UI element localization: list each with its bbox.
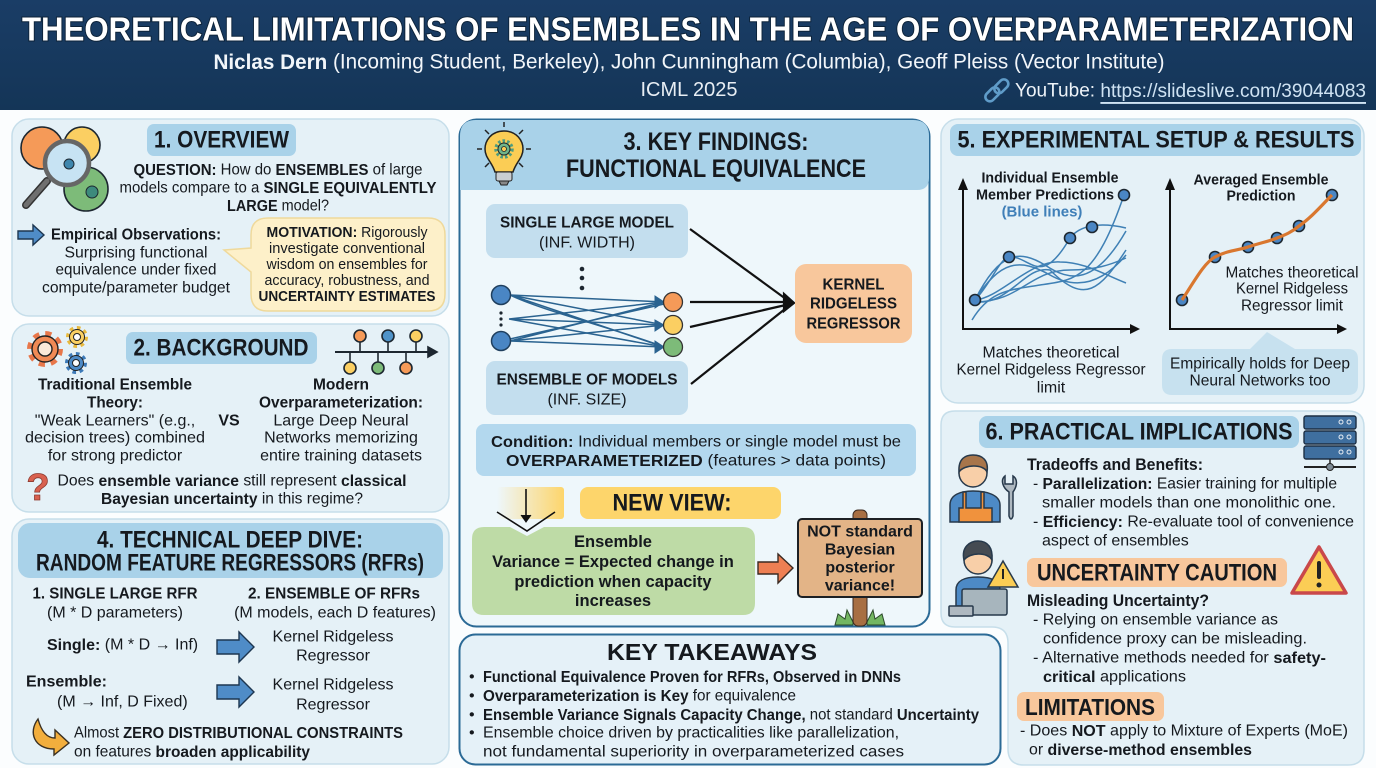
limitations heading: LIMITATIONS: [1025, 694, 1155, 720]
icon: engineer with wrench: [950, 455, 1016, 522]
condition box: [476, 424, 916, 476]
question text: LARGE model?: [227, 198, 329, 214]
arrow: [217, 632, 254, 662]
takeaway list: not fundamental superiority in overparameterized cases: [483, 744, 904, 760]
callout: deep neural networks: Empirically holds for Deep: [1170, 356, 1350, 372]
empirical observations: Surprising functional: [64, 244, 208, 262]
tradeoffs text: - Parallelization: Easier training for multiple: [1033, 476, 1337, 492]
limitations text: - Does NOT apply to Mixture of Experts (MoE): [1020, 722, 1348, 740]
modern overparameterization: Large Deep Neural: [273, 412, 409, 430]
question text: models compare to a SINGLE EQUIVALENTLY: [120, 180, 437, 196]
empirical observations: compute/parameter budget: [42, 280, 231, 296]
result: kernel ridgeless regressor: [273, 676, 393, 714]
box: kernel ridgeless regressor: [795, 264, 912, 343]
tradeoffs text: - Efficiency: Re-evaluate tool of convenience: [1033, 514, 1354, 530]
chart: individual member predictions: (Blue lines): [1002, 204, 1082, 220]
callout: deep neural networks: Neural Networks too: [1190, 372, 1331, 390]
column: ensemble of RFRs: [234, 586, 436, 622]
chart: averaged ensemble prediction: [1165, 172, 1358, 334]
modern overparameterization: [259, 376, 423, 464]
box: new view definition: [472, 512, 755, 615]
takeaway list: Functional Equivalence Proven for RFRs, Observed in DNNs: [483, 668, 901, 686]
modern overparameterization: Networks memorizing: [264, 430, 418, 446]
callout: motivation: wisdom on ensembles for: [266, 257, 428, 273]
arrow: [758, 554, 793, 583]
new view heading: [580, 487, 781, 519]
new view heading: NEW VIEW:: [612, 490, 732, 516]
limitations text: [1020, 722, 1348, 758]
misleading uncertainty text: Misleading Uncertainty?: [1027, 592, 1209, 610]
callout: motivation: accuracy, robustness, and: [264, 273, 430, 289]
open question: Does ensemble variance still represent classical: [58, 472, 406, 490]
panel 4: technical deep dive: [12, 519, 449, 764]
panel 5: experimental setup and results: [941, 119, 1364, 403]
box: ensemble of models: (INF. SIZE): [547, 392, 627, 408]
icon: question mark: ?: [26, 467, 50, 509]
empirical observations: Empirical Observations:: [51, 226, 221, 244]
callout: deep neural networks: [1162, 332, 1358, 395]
icon: person at laptop with warning: [949, 541, 1018, 616]
network diagram: [492, 286, 682, 356]
result: kernel ridgeless regressor: Regressor: [296, 696, 371, 714]
icon: light bulb: [477, 122, 531, 185]
heading: 2. BACKGROUND: [134, 334, 308, 362]
box: new view definition: prediction when capacity: [514, 573, 712, 591]
box: single large model: SINGLE LARGE MODEL: [500, 214, 674, 232]
ensemble equation: (M → Inf, D Fixed): [57, 694, 188, 710]
box: kernel ridgeless regressor: KERNEL: [822, 276, 885, 294]
constraint note: on features broaden applicability: [74, 744, 310, 760]
heading: RANDOM FEATURE REGRESSORS (RFRs): [36, 550, 424, 576]
takeaway list: [469, 668, 979, 760]
modern overparameterization: Modern: [313, 376, 369, 394]
signpost: NOT standard: [807, 524, 913, 540]
authors: Niclas Dern (Incoming Student, Berkeley), John Cunningham (Columbia), Geoff Pleiss (Vector Institute): [214, 50, 1164, 74]
tradeoffs text: [1027, 456, 1354, 550]
takeaway list: Overparameterization is Key for equivalence: [483, 688, 796, 704]
panel: key takeaways: [460, 634, 1000, 764]
limitations text: or diverse-method ensembles: [1029, 742, 1252, 758]
heading: 1. OVERVIEW: [154, 126, 289, 154]
constraint note: [74, 724, 403, 760]
heading: 3. KEY FINDINGS:: [624, 128, 808, 156]
takeaway list: Ensemble Variance Signals Capacity Change, not standard Uncertainty: [483, 706, 979, 724]
signpost: Bayesian: [825, 542, 895, 558]
panel 3: key findings: [460, 120, 930, 626]
question text: QUESTION: How do ENSEMBLES of large: [134, 162, 423, 178]
chart: individual member predictions: Member Predictions: [976, 186, 1114, 204]
misleading uncertainty text: - Alternative methods needed for safety-: [1033, 650, 1326, 666]
uncertainty caution heading: UNCERTAINTY CAUTION: [1037, 560, 1277, 586]
column: ensemble of RFRs: 2. ENSEMBLE OF RFRs: [248, 586, 420, 602]
traditional theory: Theory:: [87, 394, 143, 412]
empirical observations: equivalence under fixed: [56, 262, 216, 278]
dots: [580, 267, 584, 290]
heading: 6. PRACTICAL IMPLICATIONS: [986, 418, 1292, 446]
venue: ICML 2025: [640, 79, 738, 101]
result: kernel ridgeless regressor: Kernel Ridgeless: [273, 628, 393, 646]
callout: motivation: [224, 218, 445, 311]
box: new view definition: Variance = Expected change in: [492, 553, 734, 571]
takeaway list: •: [469, 688, 475, 704]
caption: Matches theoretical: [982, 344, 1120, 362]
icon: blue arrow: [18, 225, 44, 245]
arrows to kernel regressor: [690, 229, 794, 384]
traditional theory: "Weak Learners" (e.g.,: [35, 412, 195, 430]
column: ensemble of RFRs: (M models, each D features): [234, 604, 436, 622]
traditional theory: decision trees) combined: [25, 430, 205, 446]
chart: averaged ensemble prediction: Prediction: [1226, 188, 1296, 204]
icon: warning triangle: [1292, 547, 1346, 593]
panel 1: overview: [12, 119, 449, 316]
heading: KEY TAKEAWAYS: [607, 639, 817, 665]
tradeoffs text: smaller models than one monolithic one.: [1042, 494, 1336, 512]
callout: motivation: MOTIVATION: Rigorously: [266, 225, 428, 241]
signpost: [798, 510, 922, 626]
youtube link: YouTube: https://slideslive.com/39044083: [1015, 80, 1366, 102]
open question: Bayesian uncertainty in this regime?: [101, 490, 363, 508]
traditional theory: Traditional Ensemble: [38, 376, 192, 394]
icon: gears: [30, 328, 86, 372]
heading: 4. TECHNICAL DEEP DIVE:: [97, 526, 363, 554]
box: new view definition: increases: [575, 592, 651, 610]
header banner: [0, 0, 1376, 110]
traditional theory: for strong predictor: [48, 448, 183, 464]
misleading uncertainty text: [1027, 592, 1326, 686]
box: new view definition: Ensemble: [574, 533, 652, 551]
icon: link: [984, 78, 1010, 103]
column: single large RFR: [32, 586, 198, 622]
signpost: variance!: [825, 578, 895, 594]
condition box: OVERPARAMETERIZED (features > data points): [506, 452, 886, 470]
ensemble equation: Ensemble:: [26, 674, 107, 690]
box: kernel ridgeless regressor: RIDGELESS: [810, 296, 897, 312]
ensemble equation: [26, 674, 188, 710]
tradeoffs text: Tradeoffs and Benefits:: [1027, 456, 1203, 474]
empirical observations: [42, 226, 231, 296]
constraint note: Almost ZERO DISTRIBUTIONAL CONSTRAINTS: [74, 724, 403, 742]
caption: limit: [1037, 380, 1066, 396]
takeaway list: •: [469, 724, 475, 742]
box: kernel ridgeless regressor: REGRESSOR: [806, 316, 901, 332]
result: kernel ridgeless regressor: Kernel Ridgeless: [273, 676, 393, 694]
modern overparameterization: entire training datasets: [260, 448, 422, 464]
chart: averaged ensemble prediction: Matches theoretical: [1226, 264, 1358, 282]
open question: [58, 472, 406, 508]
panel 2: background: [12, 324, 449, 512]
icon: curved orange arrow: [33, 719, 69, 755]
box: ensemble of models: [486, 361, 688, 415]
chart: individual member predictions: [958, 170, 1140, 334]
callout: motivation: investigate conventional: [269, 241, 425, 257]
box: single large model: [486, 204, 688, 258]
condition box: Condition: Individual members or single model must be: [491, 434, 901, 450]
takeaway list: •: [469, 668, 475, 686]
takeaway list: •: [469, 706, 475, 724]
heading: [18, 523, 443, 578]
chart: averaged ensemble prediction: Kernel Ridgeless: [1236, 280, 1348, 298]
signpost: posterior: [825, 560, 895, 576]
column: single large RFR: 1. SINGLE LARGE RFR: [32, 586, 198, 602]
result: kernel ridgeless regressor: Regressor: [296, 648, 371, 664]
question text: [120, 162, 437, 214]
result: kernel ridgeless regressor: [273, 628, 393, 664]
caption: [956, 344, 1146, 396]
panel 6: practical implications: [941, 411, 1364, 765]
vs label: VS: [218, 412, 240, 430]
callout: motivation: UNCERTAINTY ESTIMATES: [258, 289, 436, 305]
column: single large RFR: (M * D parameters): [47, 604, 183, 622]
modern overparameterization: Overparameterization:: [259, 394, 423, 412]
arrow: [217, 677, 254, 707]
box: ensemble of models: ENSEMBLE OF MODELS: [496, 372, 678, 388]
chart: averaged ensemble prediction: Regressor limit: [1241, 298, 1344, 314]
icon: timeline: [335, 330, 437, 374]
misleading uncertainty text: - Relying on ensemble variance as: [1033, 612, 1278, 628]
traditional theory: [25, 376, 205, 464]
chart: averaged ensemble prediction: Averaged Ensemble: [1194, 172, 1328, 188]
tradeoffs text: aspect of ensembles: [1042, 532, 1189, 550]
icon: server: [1304, 416, 1356, 470]
icon: magnified overlapping circles: [21, 127, 108, 211]
heading: FUNCTIONAL EQUIVALENCE: [566, 155, 866, 183]
misleading uncertainty text: critical applications: [1043, 668, 1186, 686]
misleading uncertainty text: confidence proxy can be misleading.: [1043, 630, 1307, 648]
takeaway list: Ensemble choice driven by practicalities like parallelization,: [483, 724, 899, 742]
heading: [460, 120, 929, 190]
box: single large model: (INF. WIDTH): [539, 234, 635, 252]
single equation: Single: (M * D → Inf): [47, 636, 198, 654]
down arrow: [497, 487, 564, 522]
chart: individual member predictions: Individual Ensemble: [982, 170, 1118, 186]
caption: Kernel Ridgeless Regressor: [956, 362, 1146, 378]
